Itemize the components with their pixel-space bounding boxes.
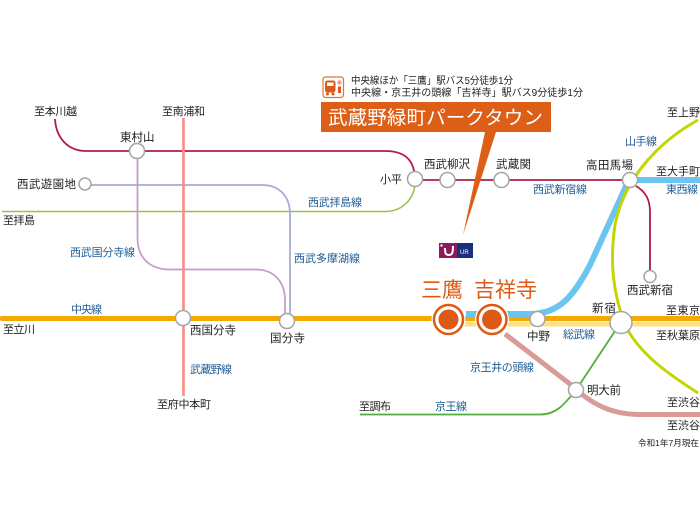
Sobu line — [440, 322, 700, 326]
Musashino line — [182, 118, 185, 396]
callout: property name: 武蔵野緑町パークタウン — [328, 107, 543, 129]
major station names — [421, 279, 537, 302]
destination labels: 至渋谷 — [667, 419, 700, 432]
station labels: 高田馬場 — [586, 159, 634, 172]
date note: 令和1年7月現在 — [638, 438, 699, 448]
Tozai line — [466, 180, 700, 314]
station labels: 明大前 — [587, 383, 621, 397]
line name labels: 西武国分寺線 — [70, 246, 135, 259]
line name labels: 京王線 — [435, 400, 467, 413]
icon: UR logo: UR — [460, 250, 469, 256]
station labels: 西武柳沢 — [424, 157, 470, 171]
icon: UR logo — [439, 243, 473, 258]
Keio Inokashira line — [505, 334, 700, 414]
station labels: 西国分寺 — [190, 324, 236, 337]
destination labels: 至大手町 — [656, 164, 700, 178]
line name labels: 中央線 — [71, 303, 102, 316]
destination labels: 至本川越 — [34, 104, 77, 118]
line name labels — [70, 134, 698, 413]
destination labels — [3, 104, 700, 432]
destination labels: 至拝島 — [3, 213, 35, 227]
Kichijoji station marker — [475, 302, 509, 336]
station labels: 小平 — [380, 173, 402, 186]
line name labels: 西武拝島線 — [308, 195, 362, 209]
major station names: 三鷹 — [421, 279, 463, 302]
station labels: 国分寺 — [270, 332, 305, 345]
destination labels: 至東京 — [666, 304, 700, 317]
station labels: 東村山 — [120, 130, 154, 144]
station markers — [79, 144, 656, 398]
access text: 中央線・京王井の頭線「吉祥寺」駅バス9分徒歩1分 — [351, 86, 583, 99]
station labels — [17, 130, 673, 397]
line name labels: 京王井の頭線 — [470, 360, 534, 374]
line name labels: 山手線 — [625, 134, 657, 148]
station labels: 中野 — [527, 330, 550, 343]
station labels: 武蔵関 — [496, 158, 531, 171]
destination labels: 至上野 — [667, 106, 700, 119]
Mitaka station marker — [432, 302, 466, 336]
destination labels: 至渋谷 — [667, 396, 700, 409]
line name labels: 西武多摩湖線 — [294, 251, 360, 265]
line name labels: 総武線 — [563, 327, 595, 341]
Seibu Tamako line — [90, 185, 290, 318]
access text: 中央線ほか「三鷹」駅バス5分徒歩1分 — [351, 74, 513, 87]
Keio line — [360, 322, 621, 414]
Yamanote line — [612, 120, 698, 393]
destination labels: 至府中本町 — [157, 397, 211, 411]
station labels: 新宿 — [592, 301, 616, 315]
Seibu Shinjuku line — [55, 119, 650, 272]
callout: property name — [321, 102, 551, 235]
destination labels: 至南浦和 — [162, 105, 205, 118]
Seibu Haijima line — [2, 182, 415, 212]
destination labels: 至調布 — [359, 400, 391, 413]
station labels: 西武新宿 — [627, 283, 673, 297]
Chuo line — [2, 316, 700, 321]
station labels: 西武遊園地 — [17, 177, 76, 191]
major station names: 吉祥寺 — [474, 279, 537, 302]
line name labels: 西武新宿線 — [533, 182, 587, 196]
line name labels: 武蔵野線 — [190, 363, 232, 376]
Seibu Kokubunji line — [138, 155, 285, 318]
icon: bus and walking — [323, 77, 344, 98]
destination labels: 至秋葉原 — [656, 328, 700, 342]
destination labels: 至立川 — [3, 322, 35, 336]
access text — [351, 74, 583, 99]
line name labels: 東西線 — [666, 183, 698, 196]
